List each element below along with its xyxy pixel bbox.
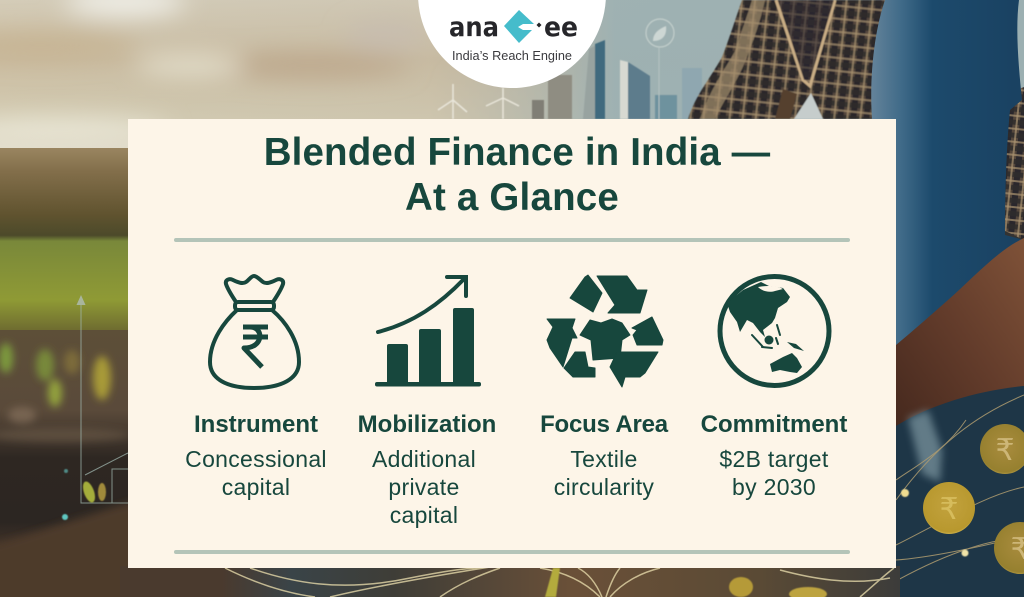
rupee coins: [923, 424, 1024, 574]
icon: globe showing asia and australia: [720, 276, 829, 386]
column: focus area: Focus Area: [540, 411, 668, 438]
column: focus area: circularity: [554, 474, 654, 500]
logo wordmark: ee: [544, 12, 578, 43]
title: [264, 131, 770, 219]
chart overlay lines: [81, 300, 128, 503]
column: mobilization: [358, 411, 496, 528]
logo wordmark: India’s Reach Engine: [452, 49, 572, 63]
icon: growth bar chart with arrow: [375, 277, 481, 386]
icon: recycling arrows with t-shirt: [547, 275, 663, 387]
column: instrument: capital: [222, 474, 290, 500]
title: At a Glance: [405, 176, 619, 219]
rupee coins: ₹: [995, 433, 1015, 468]
bottom wires strip: [120, 566, 900, 597]
column: commitment: Commitment: [701, 411, 847, 438]
title: Blended Finance in India —: [264, 131, 770, 174]
column: mobilization: private: [388, 474, 460, 500]
logo wordmark: [449, 10, 578, 63]
column: instrument: Instrument: [194, 411, 318, 438]
column: commitment: by 2030: [732, 474, 816, 500]
logo badge: [418, 0, 606, 88]
rupee coins: ₹: [939, 492, 959, 527]
column: mobilization: capital: [390, 502, 458, 528]
farmer shirt: [688, 0, 887, 119]
column: focus area: [540, 411, 668, 500]
column: mobilization: Additional: [372, 446, 476, 472]
panel: at a glance card: [128, 119, 896, 568]
column: commitment: $2B target: [719, 446, 829, 472]
column: focus area: Textile: [570, 446, 638, 472]
skyline: [438, 19, 702, 119]
column: mobilization: Mobilization: [358, 411, 496, 438]
column: commitment: [701, 411, 848, 500]
column: instrument: Concessional: [185, 446, 327, 472]
logo wordmark: ana: [449, 12, 499, 43]
farmer denim shirt and arm: [871, 0, 1024, 400]
icon: money bag with rupee: [210, 276, 299, 388]
column: instrument: [185, 411, 327, 500]
